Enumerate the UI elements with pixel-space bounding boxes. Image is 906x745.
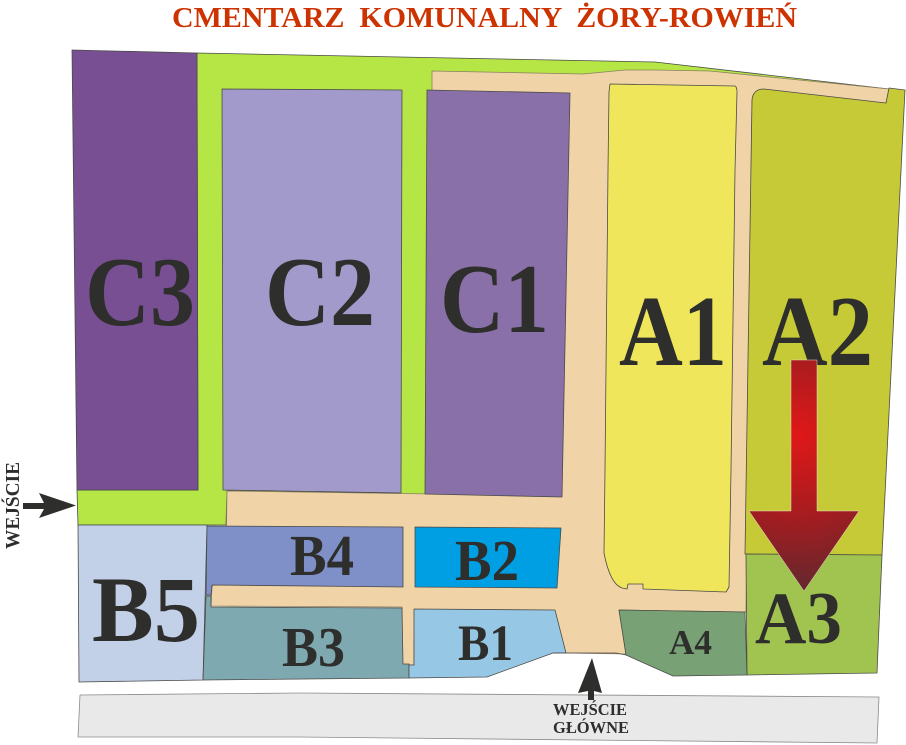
paths xyxy=(211,70,889,665)
plot B3: B3 xyxy=(282,617,345,679)
plot B3 xyxy=(203,596,409,680)
plot B1 xyxy=(409,609,566,678)
red arrow xyxy=(749,360,859,591)
plot A1: A1 xyxy=(619,275,727,387)
main entrance label: WEJŚCIE xyxy=(553,700,627,719)
plot A4: A4 xyxy=(669,623,712,662)
plot A4 xyxy=(619,610,747,676)
main entrance label: GŁÓWNE xyxy=(553,718,629,737)
plot B1: B1 xyxy=(458,616,513,672)
main entrance arrow xyxy=(578,658,602,700)
entrance road edge xyxy=(553,653,626,655)
plot B2: B2 xyxy=(455,528,519,593)
plot B5 xyxy=(78,525,207,682)
plot C3: C3 xyxy=(85,238,195,347)
main entrance label xyxy=(553,700,629,737)
plot A3 xyxy=(746,554,882,675)
plot C3 xyxy=(72,50,198,490)
side entrance label: WEJŚCIE xyxy=(0,462,24,549)
plot C1 xyxy=(425,90,570,497)
side entrance arrow xyxy=(23,493,76,518)
plot A3: A3 xyxy=(755,578,842,660)
plot B2 xyxy=(415,527,561,593)
road strip at the bottom xyxy=(78,693,879,743)
plot A2: A2 xyxy=(762,275,873,387)
green area xyxy=(77,53,905,525)
plot B5: B5 xyxy=(92,559,200,662)
plot B4 xyxy=(206,523,403,595)
title: CMENTARZ KOMUNALNY ŻORY-ROWIEŃ xyxy=(172,3,797,34)
plot A1 xyxy=(604,84,737,592)
plot C2: C2 xyxy=(265,238,375,347)
plot C1: C1 xyxy=(440,245,549,354)
plot C2 xyxy=(222,89,402,493)
plot A2 xyxy=(745,88,905,555)
plot B4: B4 xyxy=(290,523,354,588)
